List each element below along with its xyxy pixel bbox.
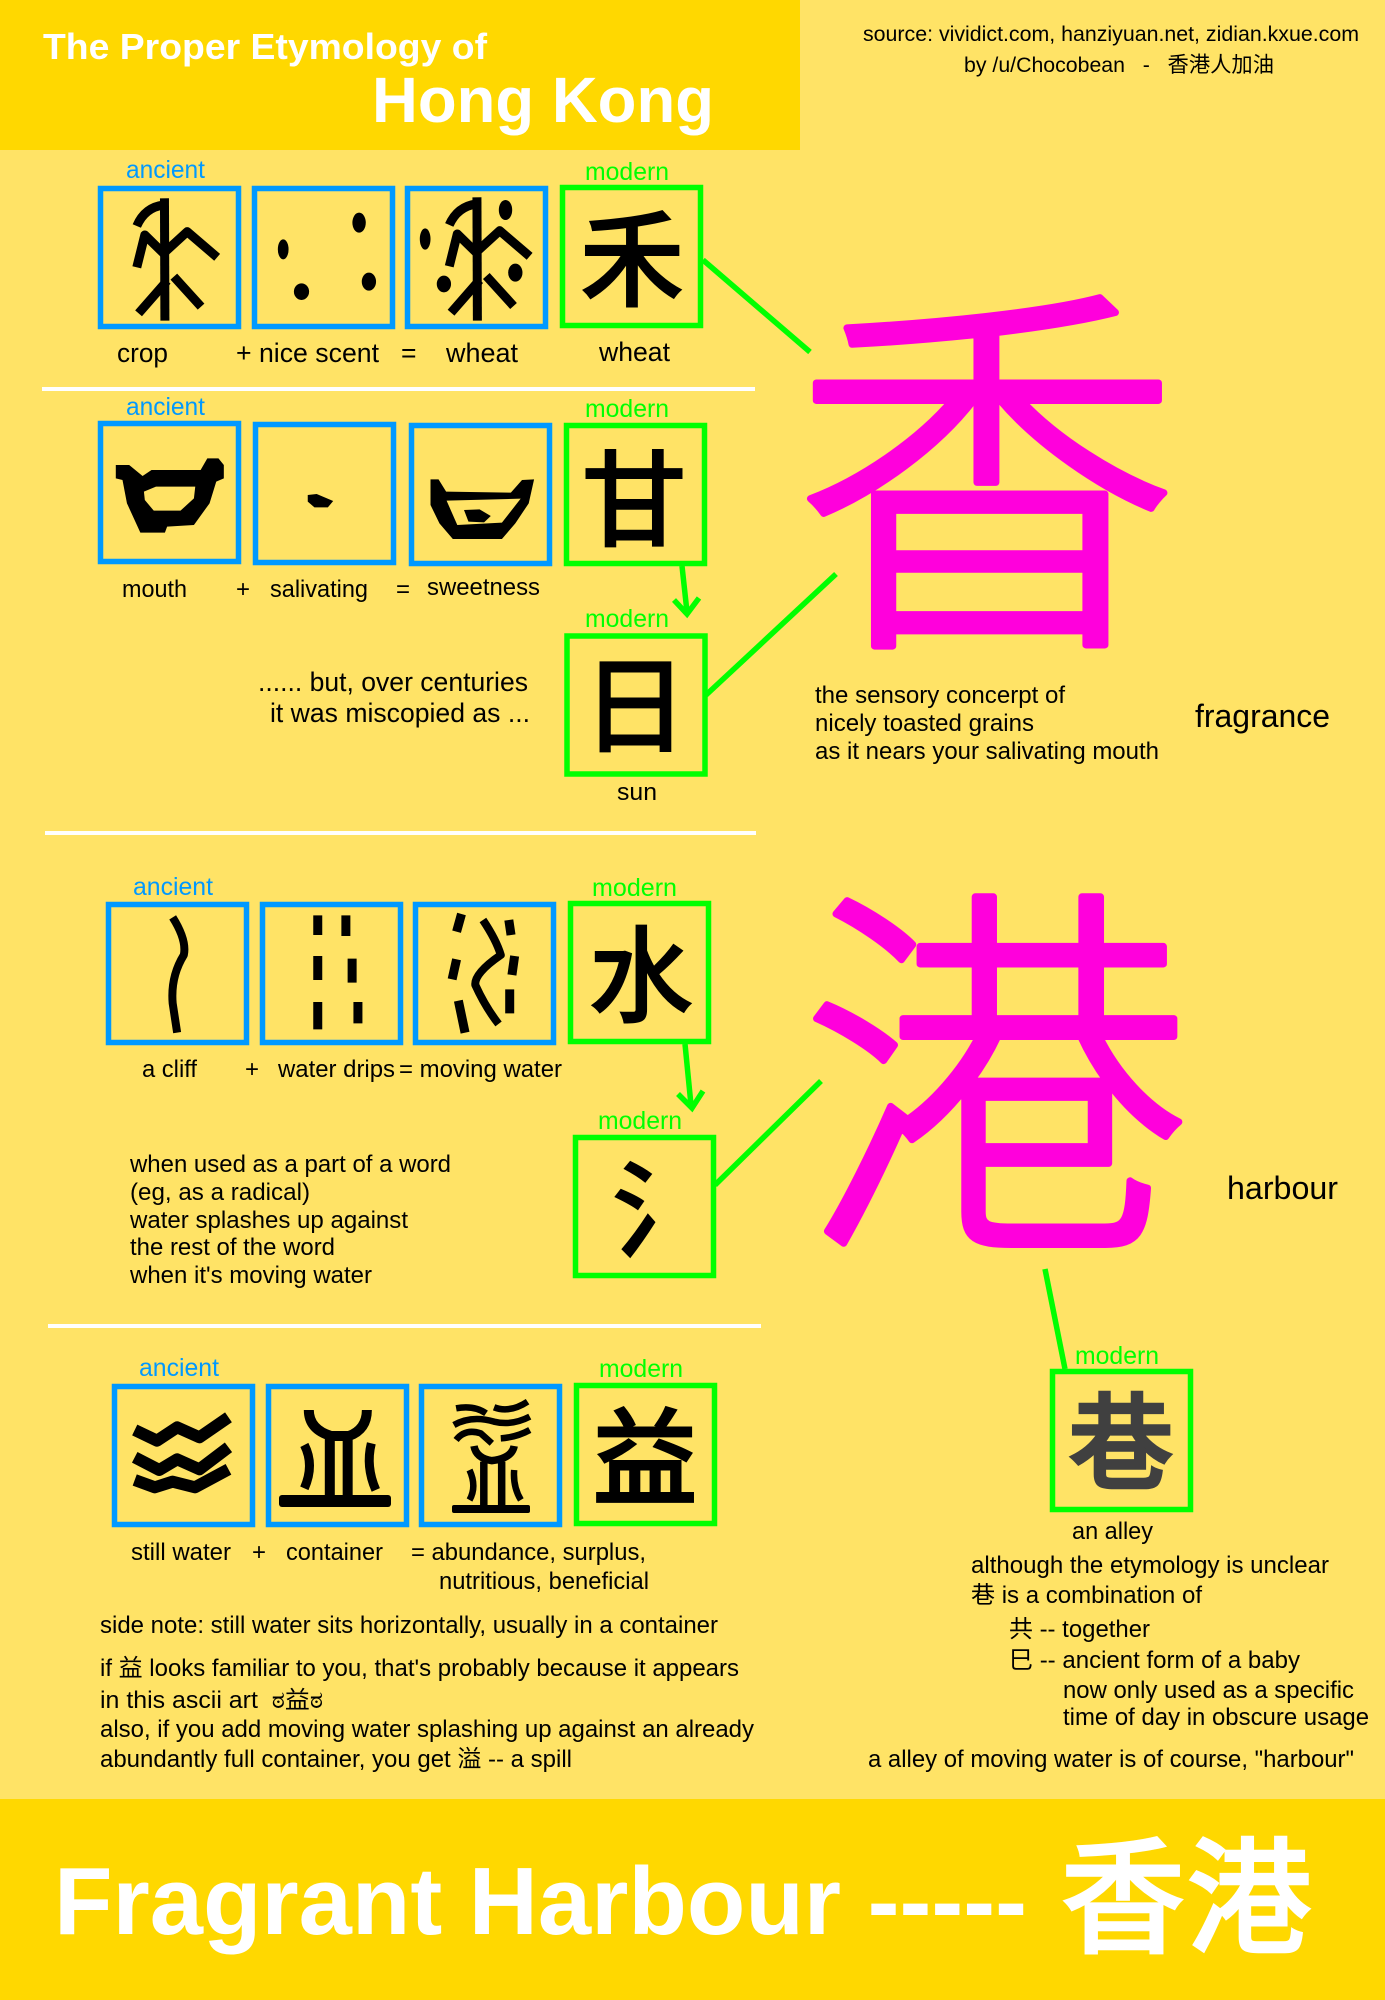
label: modern: modern bbox=[1075, 1342, 1159, 1370]
label: modern: modern bbox=[585, 158, 669, 186]
text: ascii art note: in this ascii art ಠ益ಠ bbox=[100, 1687, 323, 1714]
caption: plus: + bbox=[252, 1539, 266, 1566]
box: ancient still water bbox=[114, 1386, 252, 1524]
text: alley explanation: now only used as a specific bbox=[1063, 1677, 1354, 1704]
title banner bbox=[0, 0, 800, 150]
caption: abundance: = abundance, surplus, bbox=[411, 1539, 646, 1566]
caption: an alley: an alley bbox=[1072, 1518, 1153, 1545]
caption: abundance: nutritious, beneficial bbox=[439, 1568, 649, 1595]
arrow: water to radical bbox=[678, 1044, 703, 1108]
caption: equals: = bbox=[396, 576, 410, 603]
title banner: The Proper Etymology of bbox=[43, 26, 488, 67]
text: radical note bbox=[129, 1151, 451, 1289]
caption: abundance bbox=[411, 1539, 649, 1595]
text: alley explanation: 共 -- together bbox=[1009, 1616, 1150, 1643]
text: alley explanation: 巳 -- ancient form of a baby bbox=[1009, 1647, 1300, 1674]
caption: container: container bbox=[286, 1539, 383, 1566]
caption: mouth: mouth bbox=[122, 576, 187, 603]
label: modern: modern bbox=[585, 605, 669, 633]
label: ancient: ancient bbox=[126, 156, 205, 184]
text: radical note: the rest of the word bbox=[130, 1234, 335, 1261]
caption: nice scent: + nice scent bbox=[236, 338, 380, 368]
source credits bbox=[863, 22, 1359, 77]
box: ancient mouth bbox=[100, 424, 238, 562]
source credits: by /u/Chocobean - 香港人加油 bbox=[964, 53, 1274, 77]
big character: harbour: 港 bbox=[801, 770, 1189, 1332]
connector: radical to harbour bbox=[715, 1081, 821, 1185]
text: fragrance explanation bbox=[815, 682, 1159, 765]
box: ancient crop bbox=[100, 188, 238, 326]
label: ancient: ancient bbox=[133, 873, 213, 901]
caption: plus: + bbox=[236, 576, 250, 603]
label: modern: modern bbox=[599, 1355, 683, 1383]
caption: equals: = bbox=[401, 338, 416, 368]
box: ancient water drips bbox=[262, 904, 400, 1042]
text: radical note: when it's moving water bbox=[129, 1262, 372, 1289]
text: alley explanation: a alley of moving water is of course, "harbour" bbox=[868, 1746, 1354, 1773]
box: modern water: 水 bbox=[588, 893, 694, 1045]
text: miscopied note: it was miscopied as ... bbox=[270, 698, 530, 728]
text: alley explanation bbox=[868, 1552, 1369, 1773]
caption: sun: sun bbox=[617, 779, 657, 806]
box: ancient moving water bbox=[416, 904, 554, 1042]
box: ancient sweetness bbox=[412, 426, 550, 564]
box: modern abundance: 益 bbox=[592, 1375, 698, 1527]
label: modern: modern bbox=[598, 1107, 682, 1135]
text: radical note: (eg, as a radical) bbox=[130, 1179, 310, 1206]
text: fragrance explanation: nicely toasted grains bbox=[815, 710, 1034, 737]
text: miscopied note: ...... but, over centuries bbox=[258, 667, 528, 697]
label: modern: modern bbox=[592, 874, 677, 902]
connector: harbour to alley bbox=[1045, 1269, 1065, 1369]
caption: a cliff: a cliff bbox=[142, 1056, 197, 1083]
box: ancient nice scent bbox=[254, 188, 392, 326]
label: ancient: ancient bbox=[126, 393, 205, 421]
box: ancient salivating bbox=[256, 424, 394, 562]
source credits: source: vividict.com, hanziyuan.net, zidian.kxue.com bbox=[863, 22, 1359, 46]
text: fragrance explanation: the sensory concerpt of bbox=[815, 682, 1065, 709]
text: ascii art note bbox=[100, 1655, 754, 1773]
label: ancient: ancient bbox=[139, 1354, 219, 1382]
caption: still water: still water bbox=[131, 1539, 231, 1566]
caption: wheat: wheat bbox=[445, 338, 519, 368]
panel: abundance row bbox=[100, 1354, 754, 1773]
text: miscopied note bbox=[258, 667, 530, 728]
label: fragrance: fragrance bbox=[1195, 698, 1330, 734]
footer banner: 香港 bbox=[1060, 1798, 1312, 1980]
label: modern: modern bbox=[585, 395, 669, 423]
caption: equals moving water: = moving water bbox=[399, 1056, 562, 1083]
box: modern alley: 巷 bbox=[1068, 1360, 1174, 1512]
box: modern wheat: 禾 bbox=[579, 177, 685, 329]
box: ancient wheat bbox=[408, 188, 546, 326]
box: modern sun: 日 bbox=[582, 623, 688, 775]
connector: wheat to fragrance bbox=[703, 260, 810, 352]
panel: alley bbox=[868, 1342, 1369, 1773]
text: alley explanation: 巷 is a combination of bbox=[971, 1582, 1202, 1609]
box: ancient cliff bbox=[108, 904, 246, 1042]
title banner: Hong Kong bbox=[372, 64, 714, 136]
caption: modern wheat: wheat bbox=[598, 337, 671, 367]
text: ascii art note: also, if you add moving water splashing up against an already bbox=[100, 1716, 754, 1743]
box: modern sweetness: 甘 bbox=[581, 417, 687, 569]
box: ancient abundance bbox=[422, 1386, 560, 1524]
text: radical note: when used as a part of a word bbox=[129, 1151, 451, 1178]
panel: sweetness row bbox=[100, 393, 705, 806]
text: ascii art note: abundantly full container, you get 溢 -- a spill bbox=[100, 1746, 572, 1773]
text: alley explanation: time of day in obscure usage bbox=[1063, 1704, 1369, 1731]
big character: fragrance: 香 bbox=[793, 167, 1181, 729]
text: radical note: water splashes up against bbox=[129, 1207, 408, 1234]
caption: water drips: water drips bbox=[277, 1056, 395, 1083]
connector: sun to fragrance bbox=[706, 574, 836, 695]
caption: sweetness: sweetness bbox=[427, 574, 540, 601]
box: modern water radical: 氵 bbox=[611, 1127, 717, 1279]
label: harbour: harbour bbox=[1227, 1170, 1338, 1206]
footer banner: Fragrant Harbour ----- bbox=[54, 1848, 1027, 1955]
caption: salivating: salivating bbox=[270, 576, 368, 603]
text: side note: side note: still water sits horizontally, usually in a container bbox=[100, 1612, 718, 1639]
text: fragrance explanation: as it nears your salivating mouth bbox=[815, 738, 1159, 765]
caption: crop: crop bbox=[117, 338, 168, 368]
box: ancient container bbox=[268, 1386, 406, 1524]
footer banner bbox=[0, 1798, 1385, 2000]
arrow: sweetness to sun bbox=[674, 566, 699, 614]
panel: moving water row bbox=[108, 873, 717, 1289]
text: alley explanation: although the etymology is unclear bbox=[971, 1552, 1329, 1579]
caption: plus: + bbox=[245, 1056, 259, 1083]
text: ascii art note: if 益 looks familiar to you, that's probably because it appears bbox=[100, 1655, 739, 1682]
panel: wheat row bbox=[100, 156, 700, 368]
